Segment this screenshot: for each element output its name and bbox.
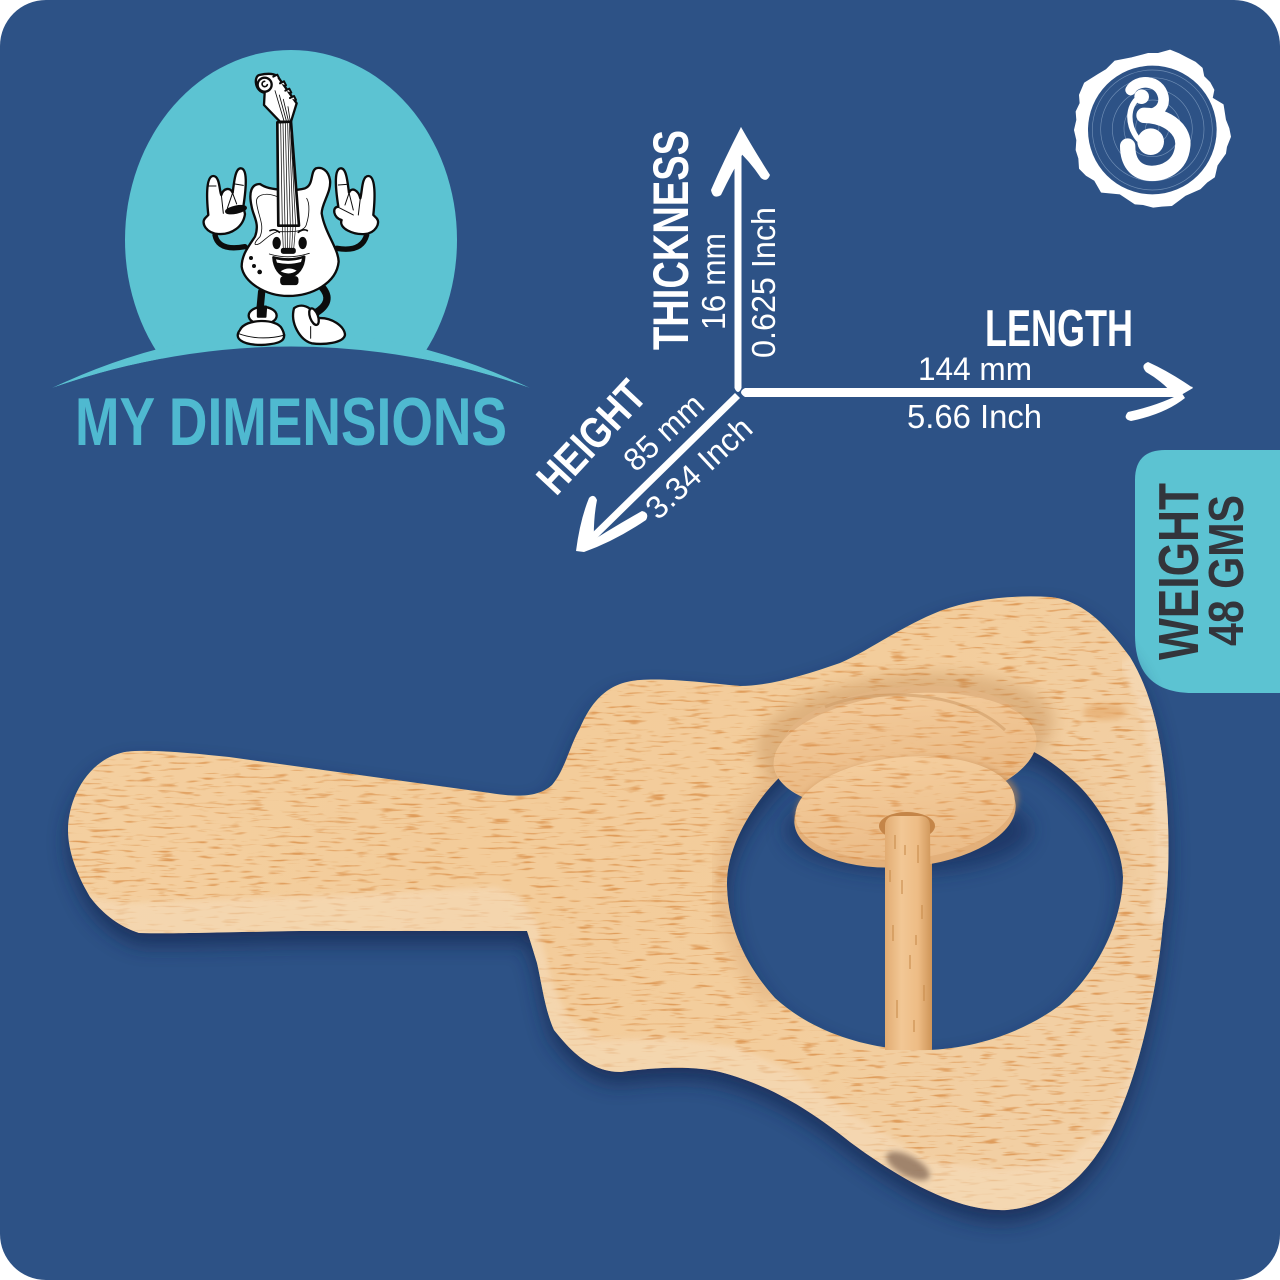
value: 16 mm: 16 mm	[695, 233, 732, 330]
disc grain	[774, 690, 1036, 861]
shadow under discs	[786, 788, 1030, 872]
product: wooden guitar rattle	[60, 590, 1175, 1222]
value: 144 mm: 144 mm	[918, 351, 1032, 387]
value: 5.66 inch: 5.66 Inch	[907, 398, 1042, 435]
arrow: height axis	[576, 393, 740, 552]
value: 3.34 inch: 3.34 Inch	[638, 410, 759, 526]
arrow: length axis	[741, 362, 1193, 421]
teal moon circle	[125, 50, 457, 430]
right edge bevel	[1130, 657, 1169, 923]
label: height: HEIGHT	[527, 371, 656, 504]
logo badge: my dimensions	[52, 50, 530, 460]
label: thickness: THICKNESS	[643, 130, 699, 350]
front disc	[790, 748, 1023, 876]
knot	[883, 1148, 933, 1184]
label: length: LENGTH	[985, 300, 1133, 358]
icon: brand logo	[1075, 51, 1230, 207]
dimension axes diagram	[527, 127, 1193, 552]
cast shadow	[68, 608, 1169, 1222]
back disc	[768, 675, 1042, 823]
rod top and socket	[879, 812, 935, 1050]
weight tab	[1135, 450, 1280, 693]
dark hill	[52, 346, 530, 440]
title: my dimensions: MY DIMENSIONS	[75, 384, 507, 460]
side band	[88, 886, 1158, 1210]
arrow: thickness axis	[711, 127, 770, 392]
teal crescent hill	[52, 332, 530, 388]
disc contact shadow	[752, 669, 1058, 780]
icon: guitar mascot	[204, 74, 378, 345]
warm patch	[1083, 704, 1127, 720]
label: weight: WEIGHT	[1147, 483, 1211, 660]
hole bevel	[714, 768, 778, 1002]
value: 48 gms: 48 GMS	[1200, 495, 1254, 646]
tab background	[1135, 450, 1280, 693]
value: 85 mm: 85 mm	[616, 386, 711, 478]
wooden rod	[885, 817, 932, 1051]
wood body	[60, 590, 1175, 1220]
value: 0.625 inch: 0.625 Inch	[745, 207, 782, 358]
